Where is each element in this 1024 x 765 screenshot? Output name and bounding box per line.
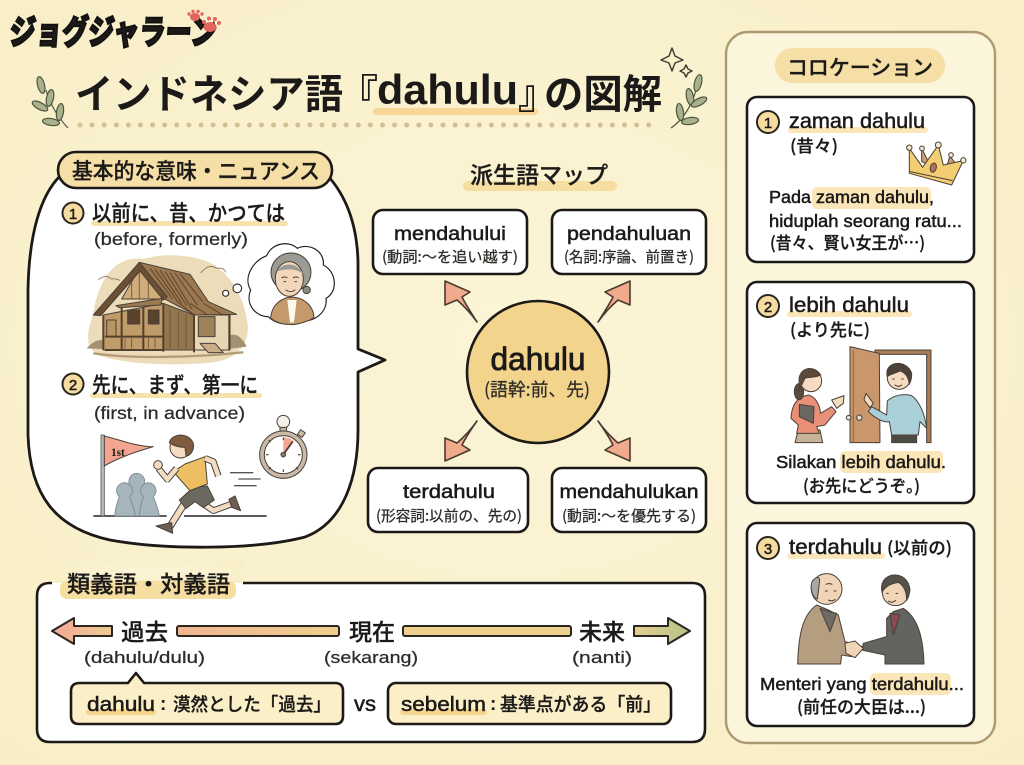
callout: dahulu: 漠然とした「過去」: [173, 691, 331, 717]
title: の図解: [544, 62, 662, 120]
heading: 類義語・対義語: [67, 565, 230, 599]
panel: synonyms and antonyms: [37, 560, 705, 742]
callout: sebelum: sebelum: [401, 694, 486, 716]
card: mendahului: (動詞:～を追い越す): [382, 246, 518, 267]
card 1: zaman dahulu: hiduplah seorang ratu...: [769, 211, 962, 231]
panel background patch: [52, 583, 243, 600]
icon: crown: [907, 142, 966, 185]
timeline arrow: future: [634, 618, 690, 644]
callout: sebelum: [388, 683, 671, 724]
timeline label: present: [324, 613, 418, 667]
card 2: lebih dahulu: [747, 282, 974, 503]
card 1: zaman dahulu: (昔々): [790, 132, 838, 157]
meaning 1 heading: [62, 196, 288, 249]
timeline bar: past to present: [177, 626, 339, 636]
callout: sebelum: :: [490, 694, 496, 715]
meaning 2 heading: 先に、まず、第一に: [92, 368, 258, 400]
meaning 2 heading: (first, in advance): [94, 403, 245, 423]
timeline arrow: past: [52, 618, 112, 644]
title: dahulu: [377, 66, 518, 113]
title: インドネシア語: [75, 62, 343, 120]
card 3: terdahulu: (以前の): [887, 534, 952, 559]
icon: left laurel: [31, 76, 68, 128]
central circle: dahulu: [467, 301, 609, 443]
card 1: zaman dahulu: 1: [764, 115, 772, 132]
arrow: to terdahulu: [445, 421, 477, 461]
meaning 2 heading: [62, 368, 262, 423]
panel: basic meaning speech bubble: [28, 152, 385, 547]
card 1: zaman dahulu: Pada zaman dahulu,: [769, 187, 934, 207]
heading: derivative map: 派生語マップ: [470, 156, 608, 190]
timeline label: past: [84, 613, 205, 667]
card: mendahulukan: (動詞:～を優先する): [562, 505, 696, 526]
illustration: handshake between ministers: [798, 574, 924, 664]
heading pill: コロケーション: [787, 52, 933, 82]
title: 』: [518, 62, 558, 120]
icon: right laurel: [671, 74, 708, 128]
callout: sebelum: 基準点がある「前」: [500, 691, 661, 717]
card: terdahulu: (形容詞:以前の、先の): [376, 505, 522, 526]
card: terdahulu: [368, 468, 528, 532]
logo: ジョグジャラーン: ジョグジャラーン: [8, 5, 219, 54]
meaning 1 heading: 1: [69, 206, 77, 223]
icon: sparkles: [661, 48, 692, 77]
illustration: old wooden house: [87, 244, 334, 364]
timeline label: present: 現在: [349, 613, 395, 647]
card 2: lebih dahulu: (より先に): [790, 316, 870, 341]
card 2: lebih dahulu: 2: [764, 299, 772, 316]
card: pendahuluan: (名詞:序論、前置き): [564, 246, 694, 267]
card 3: terdahulu: [747, 523, 974, 726]
card 1: zaman dahulu: (昔々、賢い女王が…): [770, 229, 925, 254]
arrow: to mendahulukan: [598, 421, 630, 461]
meaning 1 heading: 以前に、昔、かつては: [92, 196, 285, 228]
card 3: terdahulu: 3: [764, 541, 772, 558]
thought bubble with grandmother: [248, 244, 334, 325]
illustration: runner, flag and stopwatch: [93, 415, 307, 533]
card 2: lebih dahulu: (お先にどうぞ。): [803, 472, 920, 497]
card: mendahului: [373, 210, 527, 274]
illustration: runner, flag and stopwatch: 1st: [111, 447, 125, 459]
timeline label: present: (sekarang): [324, 648, 418, 667]
card: mendahulukan: mendahulukan: [560, 482, 698, 503]
card 1: zaman dahulu: zaman dahulu: [789, 110, 925, 133]
card 3: terdahulu: (前任の大臣は...): [797, 693, 926, 718]
card 2: lebih dahulu: lebih dahulu: [789, 294, 909, 317]
title: [75, 62, 662, 120]
card 2: lebih dahulu: Silakan lebih dahulu.: [776, 452, 946, 472]
title highlight: [373, 108, 538, 115]
timeline label: future: 未来: [579, 613, 625, 647]
card: mendahului: mendahului: [394, 224, 506, 245]
timeline label: past: (dahulu/dulu): [84, 648, 205, 667]
panel: collocations: [726, 32, 995, 743]
callout: dahulu: [71, 673, 343, 724]
callout: dahulu: :: [160, 694, 166, 715]
arrow: to pendahuluan: [598, 281, 630, 322]
card 3: terdahulu: Menteri yang terdahulu...: [760, 674, 964, 694]
callout: dahulu: dahulu: [87, 694, 155, 716]
card: terdahulu: terdahulu: [403, 482, 495, 503]
meaning 1 heading: (before, formerly): [94, 229, 248, 249]
timeline label: future: [572, 613, 632, 667]
meaning 2 heading: 2: [69, 377, 77, 394]
title: 『: [338, 62, 378, 120]
icon: paw prints: [187, 10, 221, 32]
label: vs: vs: [354, 693, 376, 716]
timeline label: past: 過去: [121, 613, 168, 647]
timeline bar: present to future: [403, 626, 571, 636]
central circle: dahulu: (語幹:前、先): [484, 376, 590, 402]
card: pendahuluan: pendahuluan: [567, 224, 691, 245]
arrow: to mendahului: [445, 281, 477, 322]
timeline label: future: (nanti): [572, 648, 632, 667]
card: pendahuluan: [552, 210, 706, 274]
card 3: terdahulu: terdahulu: [789, 536, 882, 559]
section heading pill: 基本的な意味・ニュアンス: [72, 154, 320, 186]
bubble outline: [28, 176, 385, 547]
illustration: door and two people: [791, 347, 931, 443]
central circle: dahulu: dahulu: [490, 341, 586, 377]
card: mendahulukan: [552, 468, 706, 532]
card 1: zaman dahulu: [747, 97, 974, 262]
